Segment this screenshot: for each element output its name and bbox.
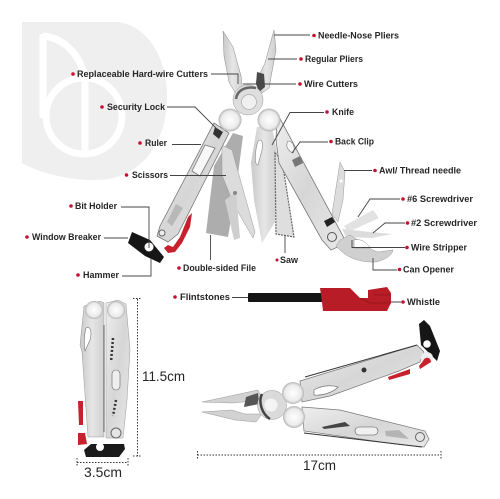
- can opener and wire stripper: [336, 235, 393, 262]
- length dimension: 17cm: 17cm: [303, 457, 336, 473]
- cutter: [244, 393, 259, 407]
- knife: [251, 127, 277, 243]
- right jaw: [256, 30, 276, 93]
- label: Wire Stripper: Wire Stripper: [411, 242, 467, 252]
- ruler marks: [111, 338, 116, 416]
- upper handle: [300, 345, 424, 402]
- red lever: [164, 213, 192, 253]
- rivets: [282, 382, 304, 404]
- label: Knife: Knife: [332, 107, 354, 117]
- red lever: [78, 401, 87, 445]
- label: #6 Screwdriver: #6 Screwdriver: [407, 194, 474, 204]
- pivot: [233, 85, 263, 115]
- rivet blocks: [218, 108, 280, 132]
- label: Security Lock: Security Lock: [107, 102, 166, 112]
- label: Flintstones: Flintstones: [180, 292, 230, 302]
- label: Hammer: Hammer: [83, 270, 119, 280]
- label: Back Clip: Back Clip: [335, 136, 374, 146]
- label: Ruler: Ruler: [145, 138, 167, 148]
- black base: [84, 444, 125, 457]
- center seam: [103, 325, 105, 432]
- folded tool: [78, 300, 130, 457]
- black head: [419, 320, 440, 361]
- label: Double-sided File: Double-sided File: [183, 263, 256, 273]
- pivot: [258, 390, 286, 420]
- folded rivets: [85, 301, 125, 319]
- fire starter and whistle: [248, 287, 391, 311]
- label: Replaceable Hard-wire Cutters: Replaceable Hard-wire Cutters: [77, 69, 208, 79]
- marks: [322, 422, 350, 429]
- right handle: [276, 113, 344, 250]
- upper jaw: [202, 390, 262, 403]
- folded body left: [80, 301, 104, 437]
- label: #2 Screwdriver: #2 Screwdriver: [411, 218, 478, 228]
- lower handle: [302, 407, 429, 447]
- awl: [332, 162, 345, 222]
- scissors: [222, 145, 255, 240]
- label: Wire Cutters: Wire Cutters: [304, 79, 358, 89]
- label: Window Breaker: Window Breaker: [32, 232, 101, 242]
- file blade: [206, 133, 243, 237]
- black hammer head: [128, 232, 164, 263]
- #2 screwdriver: [342, 229, 392, 238]
- height dimension: 11.5cm: 11.5cm: [142, 368, 185, 384]
- label: Can Opener: Can Opener: [403, 264, 454, 274]
- label: Needle-Nose Pliers: Needle-Nose Pliers: [318, 30, 399, 40]
- left handle: [157, 123, 229, 242]
- #6 screwdriver: [344, 210, 379, 232]
- open pliers tool: [202, 320, 440, 447]
- background logo watermark: [22, 22, 167, 180]
- label: Regular Pliers: Regular Pliers: [305, 54, 363, 64]
- clip slot: [84, 328, 91, 351]
- width dimension: 3.5cm: [77, 458, 128, 480]
- logo mark: [362, 368, 366, 372]
- badge: [112, 370, 120, 390]
- label: Bit Holder: Bit Holder: [75, 201, 117, 211]
- width dimension: 3.5cm: 3.5cm: [84, 464, 122, 480]
- label: Scissors: Scissors: [132, 170, 168, 180]
- upper dark edge: [305, 345, 417, 377]
- length dimension: 17cm: [198, 451, 441, 473]
- label: Saw: Saw: [280, 255, 299, 265]
- red lever: [388, 369, 410, 380]
- label: Awl/ Thread needle: Awl/ Thread needle: [379, 166, 461, 176]
- folded body right: [106, 300, 130, 438]
- label: Whistle: Whistle: [407, 297, 440, 307]
- height dimension: 11.5cm: [133, 298, 185, 456]
- wire cutter: [256, 72, 265, 92]
- main multitool: [128, 30, 393, 263]
- lower jaw: [202, 410, 262, 422]
- left jaw: [223, 31, 243, 94]
- right fold-out tools: [332, 162, 393, 262]
- leader lines: [104, 35, 405, 302]
- saw: [275, 153, 294, 237]
